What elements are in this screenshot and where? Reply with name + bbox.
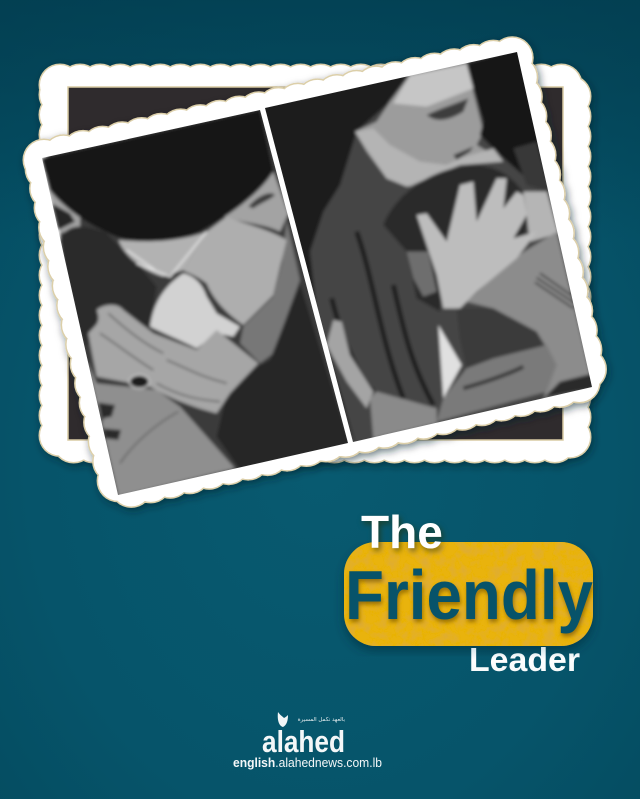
yellow badge <box>344 542 593 646</box>
photo: left, elder embracing boy <box>42 110 348 495</box>
sleeve crease <box>463 367 523 388</box>
hand <box>88 305 258 413</box>
bottom right strip <box>543 373 593 398</box>
lower sleeve left <box>370 392 437 438</box>
jacket stripes <box>535 273 573 308</box>
face <box>354 78 486 188</box>
cheek above glasses <box>118 232 207 277</box>
title badge: Friendly <box>344 542 593 646</box>
dark background upper left <box>265 76 407 431</box>
front photo frame <box>44 57 588 489</box>
boy hair <box>60 227 157 347</box>
hand <box>417 178 537 308</box>
photo: right, elder embracing boy <box>260 45 600 452</box>
boy face <box>407 252 437 297</box>
logo tagline: بالعهد نكمل المسيرة <box>298 716 345 723</box>
forehead <box>393 63 473 107</box>
dark sleeve <box>458 310 540 366</box>
white shirt <box>438 325 462 398</box>
icon: leaf and flame <box>278 712 288 727</box>
ring <box>129 375 149 388</box>
back photo frame <box>60 85 570 442</box>
beard <box>355 128 503 187</box>
lower left hand <box>327 320 373 408</box>
robe folds <box>332 232 433 405</box>
beard <box>183 217 287 325</box>
patch at right <box>513 142 550 192</box>
title: The: The <box>361 506 443 558</box>
title: Leader: Leader <box>469 641 580 678</box>
shoulder <box>523 192 558 242</box>
lower sleeve <box>437 345 557 422</box>
website: english.alahednews.com.lb <box>233 756 382 770</box>
eye and nose shading <box>427 98 473 160</box>
logo wordmark: alahed <box>262 724 345 759</box>
boy hair <box>383 165 530 312</box>
left backdrop <box>45 173 80 233</box>
boy jacket <box>467 232 593 400</box>
temple and ear <box>223 172 288 232</box>
robe collar <box>240 220 300 363</box>
boy clothes <box>87 360 235 497</box>
clothes seam <box>120 412 178 463</box>
dark robe <box>217 283 350 470</box>
knocked out word: Friendly <box>345 556 593 634</box>
glasses <box>127 232 207 277</box>
dark upper right <box>467 52 544 176</box>
turban <box>42 110 273 241</box>
hand wrinkles <box>100 313 227 402</box>
logo <box>233 712 382 770</box>
back frame dark photo <box>68 87 563 440</box>
clothes emblem <box>98 403 121 440</box>
boy cheek <box>150 273 240 348</box>
